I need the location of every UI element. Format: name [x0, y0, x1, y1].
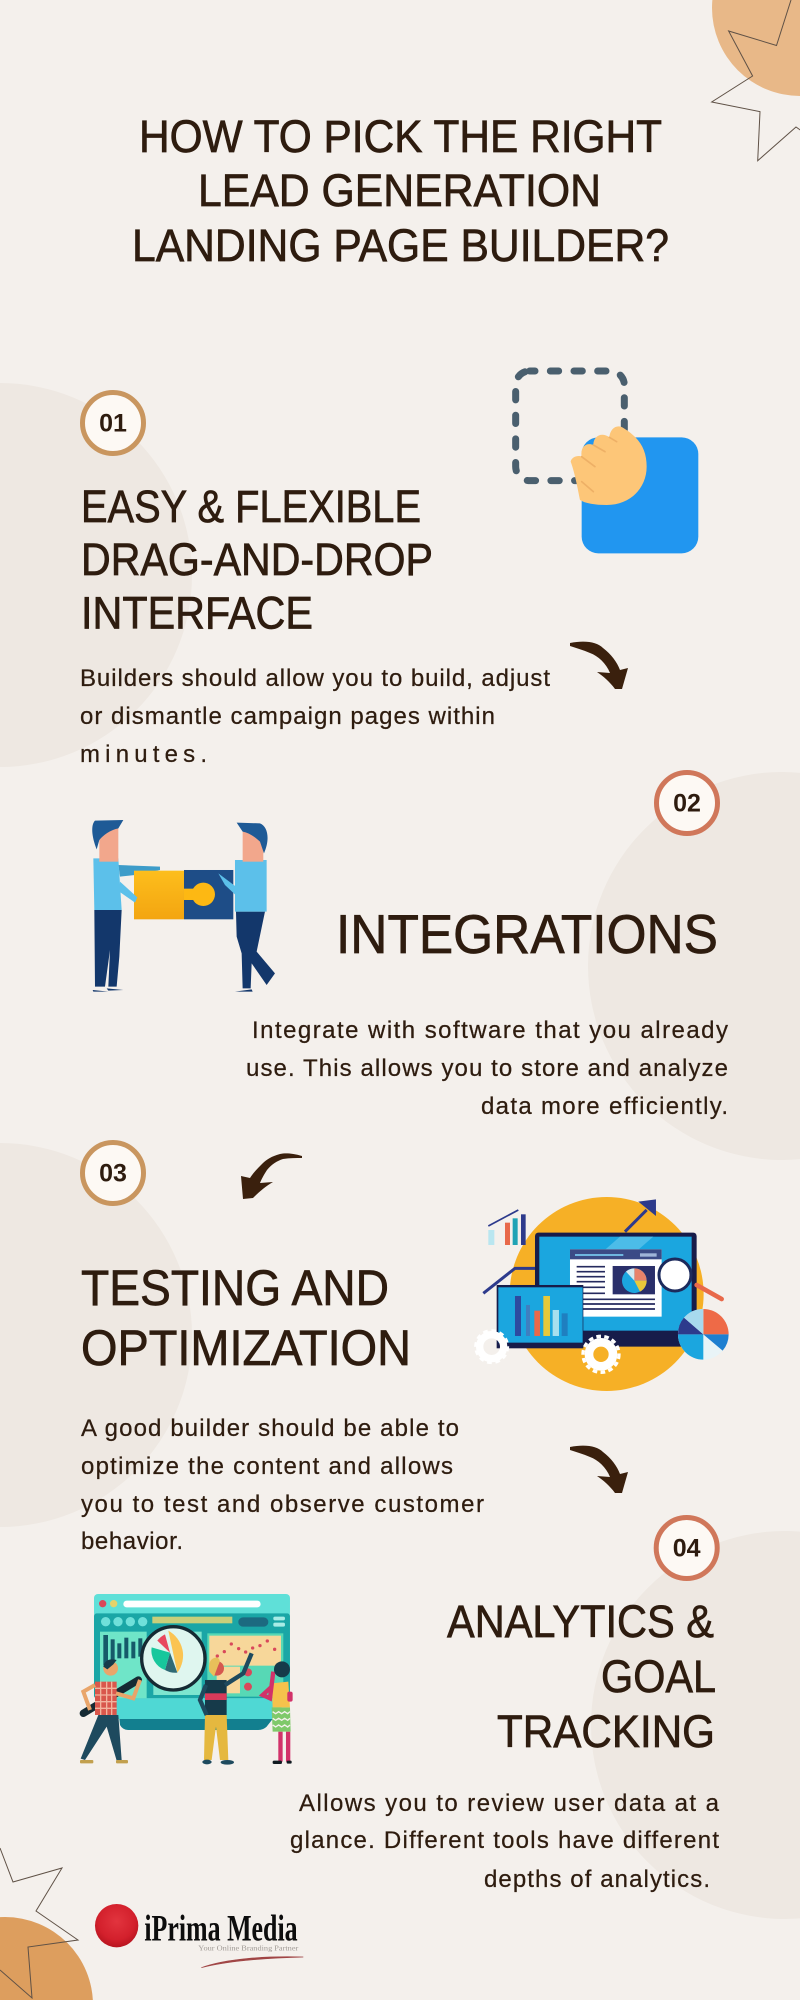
- text block: section 4 body: [290, 1790, 720, 1893]
- text block: section 4 body: Allows you to review user data at a: [299, 1790, 720, 1817]
- logo: iPrima Media: iPrima Media: [144, 1909, 298, 1950]
- background blob: section 3: [0, 1143, 192, 1527]
- badge 03: [82, 1142, 144, 1204]
- text block: section 2 body: [246, 1017, 728, 1120]
- heading: testing and optimization: OPTIMIZATION: [81, 1320, 411, 1376]
- text block: section 2 body: data more efficiently.: [481, 1093, 728, 1120]
- panel: section 3 testing: [81, 1142, 729, 1555]
- text block: section 1 body: or dismantle campaign pages within: [80, 703, 495, 730]
- text block: section 4 body: depths of analytics.: [484, 1866, 710, 1893]
- text block: section 1 body: Builders should allow you to build, adjust: [80, 665, 550, 692]
- title: [132, 111, 669, 271]
- arrow: to section 3: [241, 1153, 302, 1199]
- text block: section 3 body: you to test and observe customer: [81, 1491, 484, 1518]
- text block: section 3 body: [81, 1415, 484, 1555]
- icon: drag and drop hand: [516, 371, 698, 553]
- badge 03: 03: [99, 1160, 127, 1188]
- badge 02: [656, 772, 718, 834]
- title: LEAD GENERATION: [198, 165, 601, 216]
- badge 01: 01: [99, 410, 127, 438]
- background blob: section 1: [0, 383, 192, 767]
- heading: easy and flexible: [81, 481, 433, 638]
- badge 01: [82, 392, 144, 454]
- illustration: two people joining puzzle pieces: [92, 820, 275, 992]
- text block: section 3 body: A good builder should be able to: [81, 1415, 459, 1442]
- heading: analytics and goal tracking: [447, 1596, 716, 1757]
- badge 02: 02: [673, 790, 701, 818]
- logo: iPrima Media: Your Online Branding Partner: [198, 1945, 299, 1953]
- panel: section 1 drag-and-drop: [80, 371, 698, 768]
- heading: analytics and goal tracking: ANALYTICS &: [447, 1596, 714, 1647]
- decoration: bottom-left circle and star: [0, 1848, 93, 2000]
- heading: testing and optimization: [81, 1260, 411, 1376]
- heading: easy and flexible: EASY & FLEXIBLE: [81, 481, 421, 532]
- text block: section 1 body: [80, 665, 550, 768]
- heading: analytics and goal tracking: GOAL: [601, 1651, 716, 1702]
- heading: easy and flexible: INTERFACE: [81, 588, 313, 638]
- text block: section 2 body: Integrate with software that you already: [252, 1017, 728, 1044]
- text block: section 3 body: behavior.: [81, 1528, 183, 1555]
- text block: section 1 body: minutes.: [80, 741, 207, 768]
- title: HOW TO PICK THE RIGHT: [139, 111, 662, 162]
- text block: section 4 body: glance. Different tools have different: [290, 1827, 719, 1854]
- background blob: section 2: [588, 772, 800, 1160]
- panel: section 4 analytics: [80, 1518, 720, 1893]
- heading: testing and optimization: TESTING AND: [81, 1260, 389, 1316]
- text block: section 2 body: use. This allows you to store and analyze: [246, 1055, 728, 1082]
- background blob: section 4: [591, 1531, 800, 1919]
- text block: section 3 body: optimize the content and allows: [81, 1453, 453, 1480]
- heading: analytics and goal tracking: TRACKING: [497, 1706, 715, 1757]
- panel: section 2 integrations: [92, 772, 728, 1120]
- illustration: analytics dashboard monitor: [476, 1197, 729, 1391]
- decoration: top-right circle and star: [712, 0, 800, 161]
- heading: integrations: INTEGRATIONS: [336, 903, 718, 965]
- logo: iPrima Media: [95, 1904, 303, 1968]
- arrow: to section 4: [570, 1446, 628, 1493]
- illustration: team reviewing analytics screen: [80, 1594, 293, 1765]
- badge 04: [656, 1518, 717, 1578]
- title: LANDING PAGE BUILDER?: [132, 220, 669, 271]
- heading: easy and flexible: DRAG-AND-DROP: [81, 534, 433, 585]
- badge 04: 04: [673, 1534, 701, 1562]
- arrow: to section 2: [570, 642, 628, 689]
